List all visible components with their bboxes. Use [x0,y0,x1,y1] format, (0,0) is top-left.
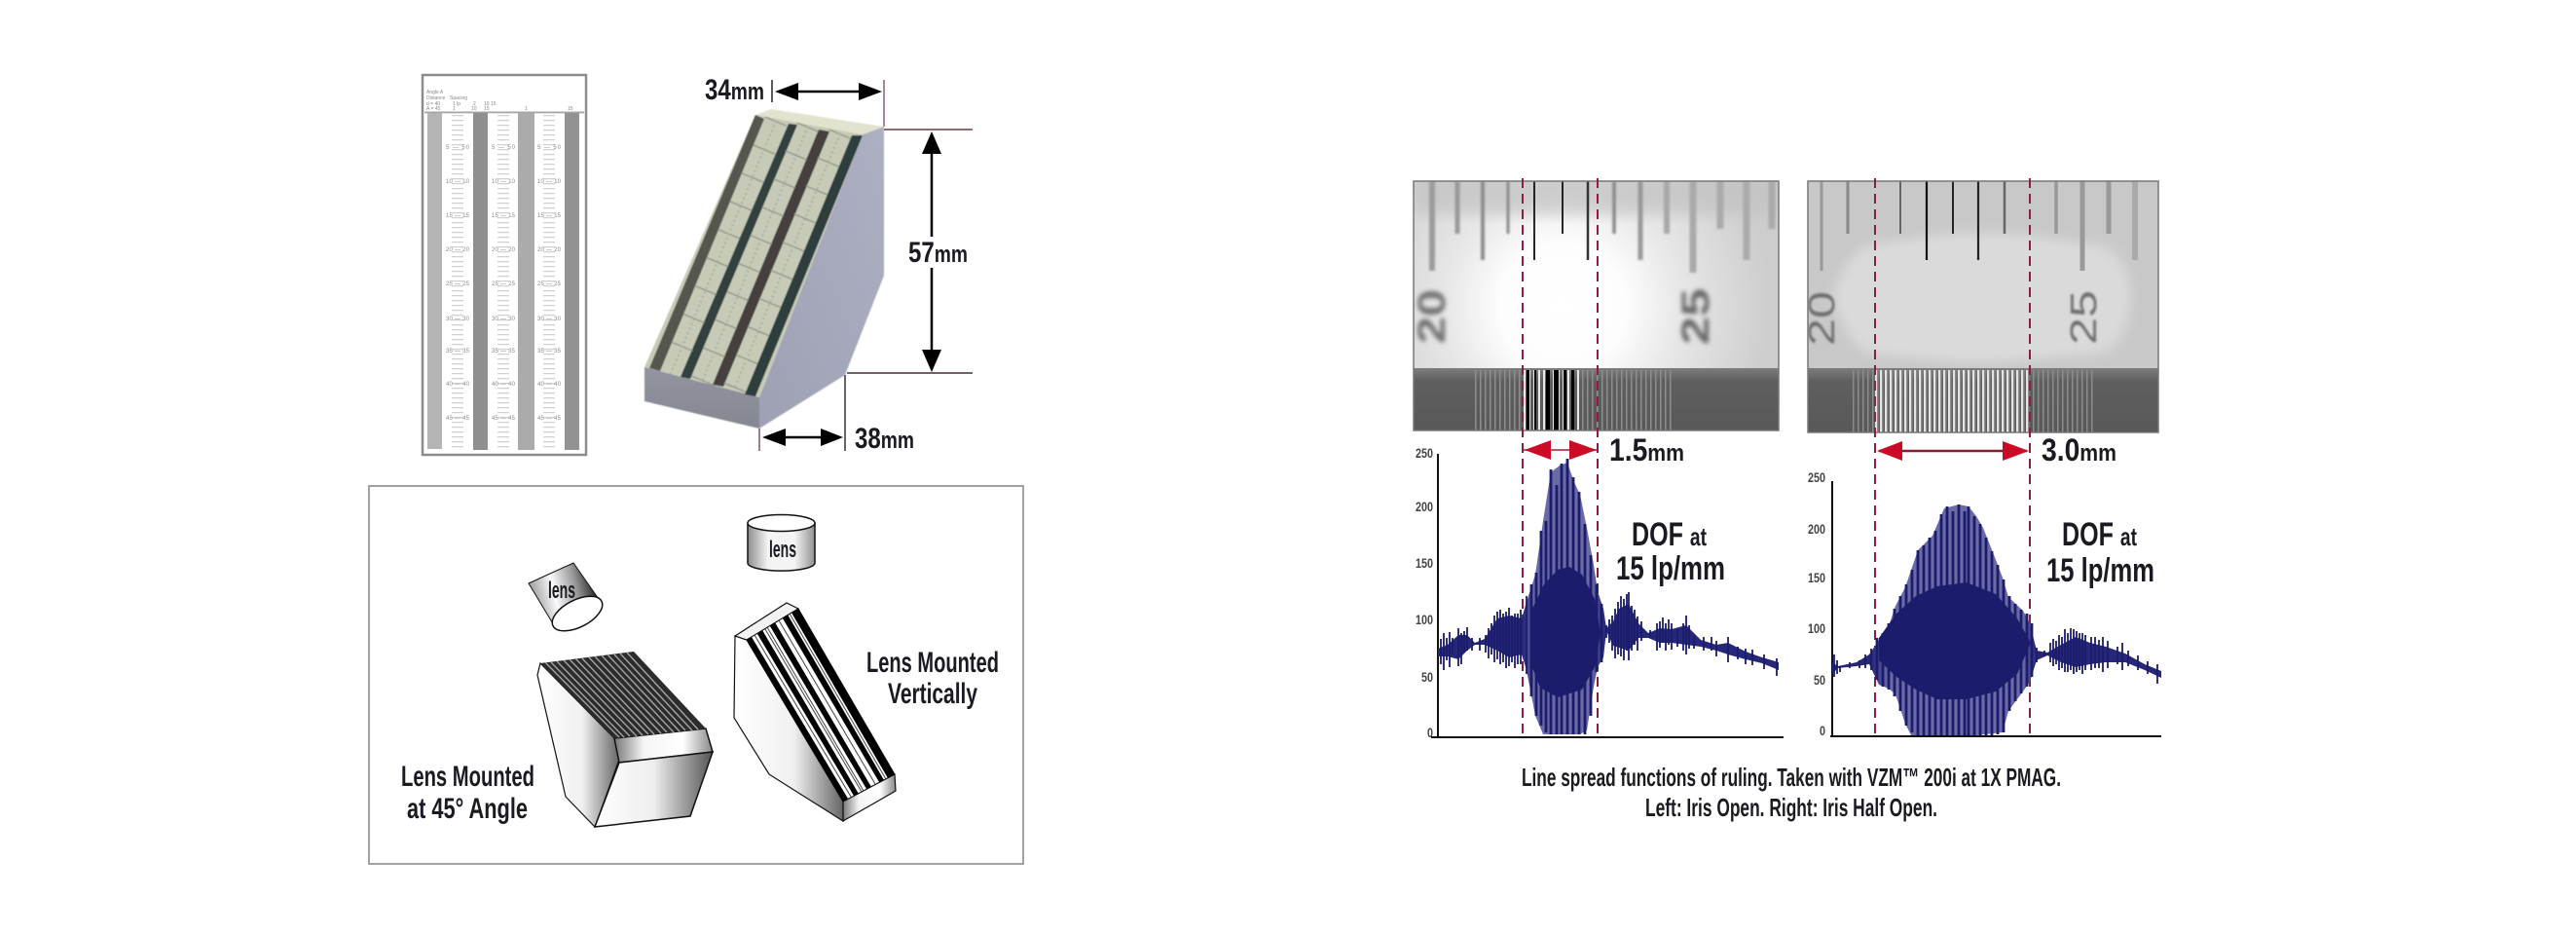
ruler scales of target sheet: 5 — 50 [537,145,562,151]
caption: Line spread functions of ruling. Taken with VZM™ 200i at 1X PMAG. [1522,763,2061,792]
photo: ruler with iris open: 20 [1411,289,1454,344]
dimension: 38mm [759,375,914,455]
ruler scales of target sheet: 20 — 20 [492,247,516,253]
panel: 3D target block with dimensions [644,74,973,455]
label: DOF left: 15 lp/mm [1616,550,1725,587]
label: DOF left [1616,516,1725,587]
ruler scales of target sheet: 35 — 35 [537,349,562,355]
ruler scales of target sheet [446,115,562,449]
ruler scales of target sheet: 30 — 30 [446,317,470,322]
striped target face [747,609,895,802]
arrow: 1.5mm width [1524,440,1597,460]
ruler scales of target sheet: 45 — 45 [492,416,516,422]
icon: angled lens cylinder: lens [548,578,575,604]
label: lens mounted vertically: Vertically [888,678,977,710]
block side face [759,127,884,429]
dashed guide lines: left measurement [1523,178,1598,737]
label: 3.0mm: 3.0mm [2042,432,2116,467]
photo: ruler with iris open: 25 [1674,288,1717,345]
header text of target sheet: Distance [426,95,446,101]
dimension: 34mm: 34mm [705,74,764,106]
header text of target sheet: 15 [568,106,573,112]
y axis labels: 250 [1808,469,1825,485]
y axis labels [1416,445,1433,740]
ruler scales of target sheet: 25 — 25 [446,281,470,287]
label: DOF right: DOF at [2062,516,2137,553]
panel: lens mounting diagram [369,486,1023,864]
label: DOF right: 15 lp/mm [2046,552,2154,589]
header text of target sheet: 10 15 [484,101,497,107]
ruler scales of target sheet: 30 — 30 [537,317,562,322]
block angled face with stripes [644,115,863,397]
dashed guide lines: right measurement [1875,178,2030,738]
y axis and x axis [1431,454,1784,737]
ruler scales of target sheet: 5 — 50 [492,145,516,151]
y axis labels [1808,469,1825,738]
ruler scales of target sheet: 25 — 25 [492,281,516,287]
line spread chart: iris open [1416,445,1784,740]
label: 1.5mm: 1.5mm [1609,432,1684,467]
block mounted vertically [734,603,896,821]
ruler scales of target sheet: 35 — 35 [492,349,516,355]
photo: ruler with iris half open: 20 [1802,291,1843,346]
label: DOF right [2046,516,2154,589]
label: lens mounted at 45 degree angle [401,761,534,825]
photo: ruler with iris open [1411,171,1779,430]
caption: Left: Iris Open. Right: Iris Half Open. [1645,793,1937,822]
header text of target sheet: Angle A [426,90,444,95]
y axis labels: 200 [1416,499,1433,514]
y axis labels: 250 [1416,445,1433,461]
icon: angled lens cylinder [529,563,607,638]
ruler scales of target sheet: 10 — 10 [537,179,562,185]
block mounted at 45 degrees [537,652,713,827]
y axis labels: 150 [1808,570,1825,585]
ruler scales of target sheet: 45 — 45 [446,416,470,422]
dimension: 38mm: 38mm [855,423,914,455]
header text of target sheet: 10 [471,106,477,112]
icon: vertical lens cylinder [748,514,815,571]
icon: vertical lens cylinder: lens [769,537,796,563]
label: lens mounted vertically: Lens Mounted [866,647,999,679]
ruler scales of target sheet: 10 — 10 [492,179,516,185]
hatched target face [540,652,706,738]
header text of target sheet: 1 [453,106,456,112]
dimension: 34mm [705,74,884,127]
ruler scales of target sheet: 30 — 30 [492,317,516,322]
bands of target sheet [427,113,579,450]
y axis labels: 200 [1808,521,1825,537]
caption [1522,763,2061,822]
dimension: 57mm [847,130,973,373]
header text of target sheet: 1 lp [453,101,460,107]
y axis and x axis [1830,481,2161,736]
y axis labels: 50 [1421,669,1433,685]
header text of target sheet: 1 [525,106,528,112]
line spread chart: iris half open [1808,469,2161,738]
signal trace [1832,504,2161,735]
block front face [644,367,759,429]
label: lens mounted vertically [866,647,999,710]
y axis labels: 0 [1427,725,1433,740]
y axis labels: 0 [1820,723,1825,738]
signal trace [1438,459,1779,734]
ruler scales of target sheet: 20 — 20 [537,247,562,253]
ruler scales of target sheet: 45 — 45 [537,416,562,422]
label: lens mounted at 45 degree angle: at 45° Angle [407,793,528,825]
ruler scales of target sheet: 40 — 40 [492,382,516,388]
ruler scales of target sheet: 5 — 50 [446,145,470,151]
ruler scales of target sheet: 25 — 25 [537,281,562,287]
header text of target sheet: A = 45 [426,106,441,112]
photo: ruler with iris half open: 25 [2064,290,2105,345]
y axis labels: 100 [1416,612,1433,627]
header text of target sheet [426,90,573,112]
y axis labels: 50 [1814,672,1825,688]
photo: ruler with iris half open [1802,181,2158,432]
header text of target sheet: 15 [484,106,490,112]
ruler scales of target sheet: 20 — 20 [446,247,470,253]
header text of target sheet: 2 [473,101,476,107]
header text of target sheet: Spacing [450,95,467,101]
ruler scales of target sheet: 35 — 35 [446,349,470,355]
ruler scales of target sheet: 15 — 15 [446,213,470,219]
label: lens mounted at 45 degree angle: Lens Mounted [401,761,534,793]
block solid [644,109,884,429]
ruler scales of target sheet: 15 — 15 [537,213,562,219]
ruler scales of target sheet: 10 — 10 [446,179,470,185]
ruler scales of target sheet: 15 — 15 [492,213,516,219]
panel: printed depth of field target sheet [423,75,586,455]
arrow: 3.0mm width [1877,441,2029,461]
ruler scales of target sheet: 40 — 40 [537,382,562,388]
y axis labels: 150 [1416,555,1433,571]
label: DOF left: DOF at [1632,516,1707,553]
y axis labels: 100 [1808,620,1825,636]
dimension: 57mm: 57mm [908,237,968,269]
ruler scales of target sheet: 40 — 40 [446,382,470,388]
block top edge [755,109,884,134]
header text of target sheet: d = 40 [426,101,440,107]
